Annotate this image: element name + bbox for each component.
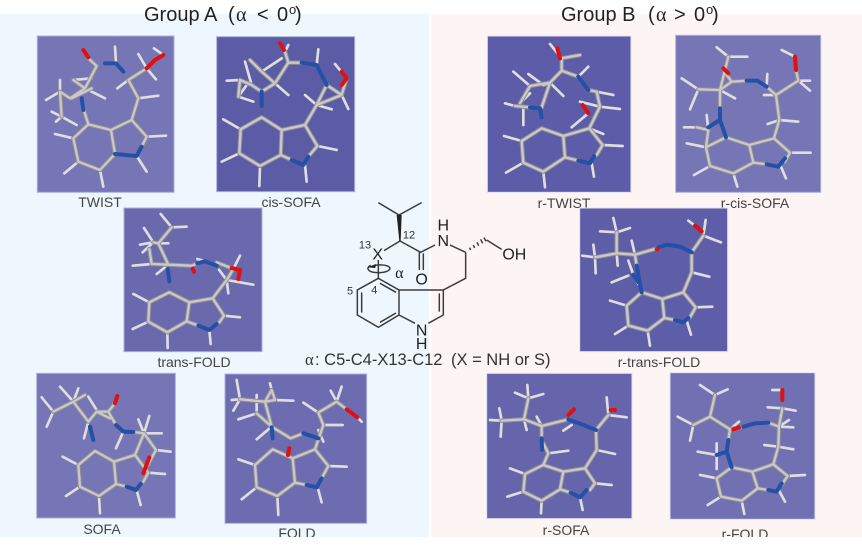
- bottom margin: [0, 537, 862, 547]
- panel: r-SOFA conformer: [487, 373, 632, 519]
- title: Group B: Group B: [561, 4, 635, 26]
- label: FOLD: FOLD: [278, 525, 316, 541]
- label: SOFA: SOFA: [83, 521, 121, 537]
- atom labels: [347, 218, 526, 353]
- atom labels: N: [438, 233, 449, 250]
- title: Group B: α: [656, 4, 667, 26]
- atom labels: OH: [502, 246, 526, 263]
- hashed bond: [470, 238, 486, 250]
- title: Group B: (: [648, 4, 655, 26]
- label: TWIST: TWIST: [78, 194, 122, 210]
- panel: TWIST conformer: [37, 36, 174, 192]
- label: r-SOFA: r-SOFA: [543, 522, 590, 538]
- title: Group A: (: [228, 4, 235, 26]
- atom labels: 13: [359, 239, 371, 251]
- atom labels: 5: [347, 286, 353, 298]
- panel: r-trans-FOLD conformer: [580, 208, 728, 352]
- panel: Group B background: [431, 14, 862, 537]
- caption: dihedral definition: : C5-C4-X13-C12: [315, 351, 442, 369]
- caption: dihedral definition: α: [305, 350, 314, 369]
- rotation arrowhead: [367, 264, 376, 268]
- title: Group B: ): [712, 4, 719, 26]
- label: r-TWIST: r-TWIST: [538, 195, 591, 211]
- label: cis-SOFA: cis-SOFA: [261, 194, 321, 210]
- label: r-FOLD: r-FOLD: [722, 526, 768, 542]
- title: Group B: 0: [694, 4, 705, 26]
- atom labels: N: [416, 323, 427, 340]
- caption: dihedral definition: (X = NH or S): [451, 351, 550, 369]
- panel: FOLD conformer: [225, 374, 367, 523]
- panel: r-TWIST conformer: [487, 36, 631, 192]
- atom labels: O: [415, 272, 428, 289]
- atom labels: α: [395, 265, 404, 282]
- panel: r-FOLD conformer: [670, 373, 815, 519]
- panel: Group A background: [0, 14, 429, 537]
- title: Group A: α: [236, 4, 247, 26]
- rotation arrow: [368, 265, 390, 273]
- label: r-cis-SOFA: r-cis-SOFA: [721, 195, 790, 211]
- panel: SOFA conformer: [37, 373, 175, 518]
- title: Group A: o: [289, 2, 296, 17]
- stereo wedge bond: [397, 215, 402, 241]
- label: trans-FOLD: trans-FOLD: [157, 354, 231, 370]
- panel: cis-SOFA conformer: [217, 37, 355, 192]
- panel: trans-FOLD conformer: [124, 208, 262, 352]
- title: Group A: ): [295, 4, 302, 26]
- atom labels: 4: [371, 285, 377, 297]
- label: r-trans-FOLD: r-trans-FOLD: [618, 354, 700, 370]
- title: Group A: 0: [277, 4, 288, 26]
- atom labels: H: [416, 336, 427, 353]
- atom labels: H: [438, 218, 449, 235]
- title: Group B: >: [674, 4, 686, 26]
- panel: r-cis-SOFA conformer: [676, 35, 821, 192]
- title: Group A: Group A: [144, 4, 218, 26]
- atom labels: X: [372, 246, 383, 263]
- centre chemical structure: [347, 203, 526, 353]
- atom labels: 12: [403, 230, 415, 242]
- title: Group B: o: [706, 2, 713, 17]
- title: Group A: <: [257, 4, 269, 26]
